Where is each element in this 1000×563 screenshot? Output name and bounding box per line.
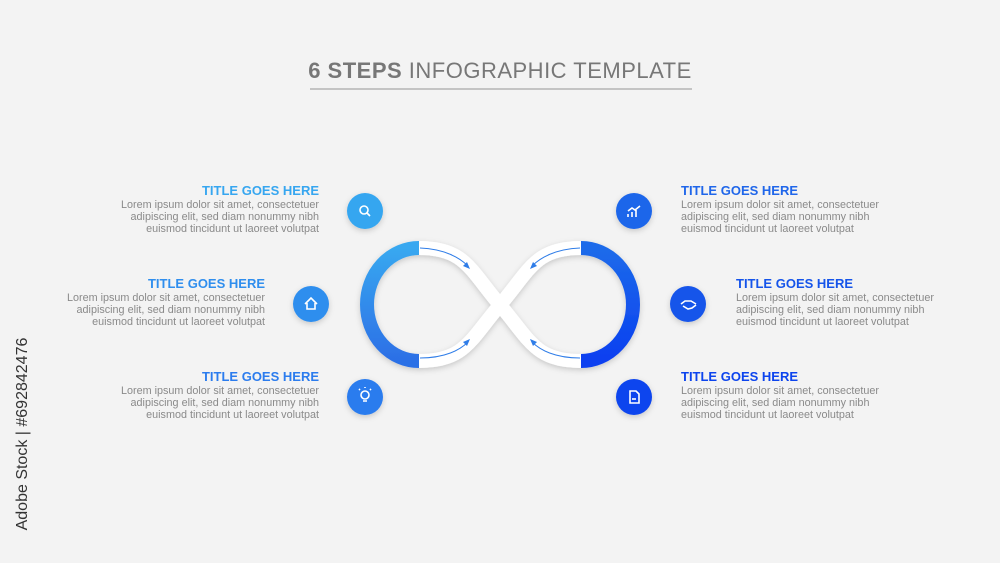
step 3 text: [121, 369, 319, 421]
step 2 text: adipiscing elit, sed diam nonummy nibh: [77, 304, 265, 316]
white band: [419, 248, 581, 361]
step 4 text: TITLE GOES HERE: [681, 183, 798, 198]
step 1 text: adipiscing elit, sed diam nonummy nibh: [131, 211, 319, 223]
title underline: [310, 88, 692, 90]
step 3 text: euismod tincidunt ut laoreet volutpat: [146, 409, 319, 421]
step 4 text: adipiscing elit, sed diam nonummy nibh: [681, 211, 869, 223]
step 2 text: euismod tincidunt ut laoreet volutpat: [92, 316, 265, 328]
step 3 text: adipiscing elit, sed diam nonummy nibh: [131, 397, 319, 409]
step 5 text: adipiscing elit, sed diam nonummy nibh: [736, 304, 924, 316]
icon: home: [305, 298, 317, 309]
step 1 text: Lorem ipsum dolor sit amet, consectetuer: [121, 199, 319, 211]
step 4 text: euismod tincidunt ut laoreet volutpat: [681, 223, 854, 235]
icon: search: [360, 206, 370, 216]
step 6 text: adipiscing elit, sed diam nonummy nibh: [681, 397, 869, 409]
icon: chart: [628, 206, 640, 217]
step 5 text: [736, 276, 934, 328]
step 5 text: Lorem ipsum dolor sit amet, consectetuer: [736, 292, 934, 304]
right ring arc: [581, 248, 633, 361]
icon: bulb: [359, 387, 371, 401]
step 1 text: TITLE GOES HERE: [202, 183, 319, 198]
step 1 text: [121, 183, 319, 235]
step 6 text: [681, 369, 879, 421]
step 5 text: euismod tincidunt ut laoreet volutpat: [736, 316, 909, 328]
arrows: [420, 248, 580, 358]
step 6 text: TITLE GOES HERE: [681, 369, 798, 384]
step 4 text: [681, 183, 879, 235]
step 6 text: Lorem ipsum dolor sit amet, consectetuer: [681, 385, 879, 397]
left ring arc: [367, 248, 419, 361]
step 5 text: TITLE GOES HERE: [736, 276, 853, 291]
watermark vertical text: Adobe Stock | #692842476: [14, 338, 31, 530]
step 2 text: Lorem ipsum dolor sit amet, consectetuer: [67, 292, 265, 304]
icon circles: [293, 193, 706, 415]
title: 6 STEPS INFOGRAPHIC TEMPLATE: [308, 58, 692, 83]
step 2 text: TITLE GOES HERE: [148, 276, 265, 291]
step 1 text: euismod tincidunt ut laoreet volutpat: [146, 223, 319, 235]
step 2 text: [67, 276, 265, 328]
icon: document: [630, 391, 639, 403]
step 4 text: Lorem ipsum dolor sit amet, consectetuer: [681, 199, 879, 211]
step 3 text: TITLE GOES HERE: [202, 369, 319, 384]
step 3 text: Lorem ipsum dolor sit amet, consectetuer: [121, 385, 319, 397]
icon: handshake: [681, 301, 696, 309]
step 6 text: euismod tincidunt ut laoreet volutpat: [681, 409, 854, 421]
